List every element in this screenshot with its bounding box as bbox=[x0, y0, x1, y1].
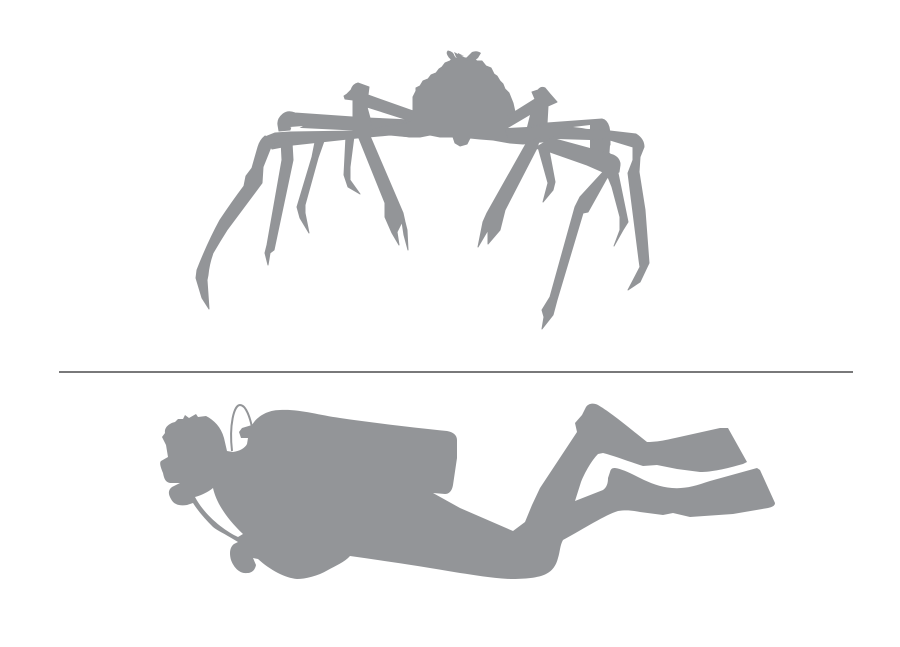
diver silhouette bbox=[160, 404, 775, 579]
left third leg bbox=[297, 141, 324, 233]
diver hose gap bbox=[195, 488, 243, 537]
right inner long leg bbox=[590, 138, 628, 246]
left raised arm with knob bbox=[344, 83, 413, 132]
diver hose loop bbox=[231, 405, 252, 451]
divider line bbox=[59, 371, 853, 373]
right big leg bbox=[535, 137, 620, 329]
left upper bar and shoulder bbox=[278, 112, 411, 137]
right thin leg bbox=[538, 147, 555, 202]
right raised arm with knob bbox=[508, 87, 557, 140]
spider crab silhouette bbox=[196, 51, 649, 329]
crab carapace bbox=[400, 58, 530, 146]
left thin leg bbox=[344, 136, 360, 194]
right upper bar bbox=[530, 119, 610, 145]
left pincer leg bbox=[358, 136, 408, 250]
left second leg bbox=[265, 140, 293, 265]
crab highlight gaps bbox=[290, 115, 590, 148]
left second bar bbox=[265, 122, 411, 149]
crab eye horns bbox=[447, 51, 457, 60]
crab right horn bbox=[454, 51, 481, 61]
right outer long leg bbox=[505, 126, 649, 290]
right pincer leg bbox=[478, 138, 540, 247]
left outer long leg bbox=[196, 136, 278, 309]
diver body, tank, legs and fins bbox=[160, 404, 775, 579]
